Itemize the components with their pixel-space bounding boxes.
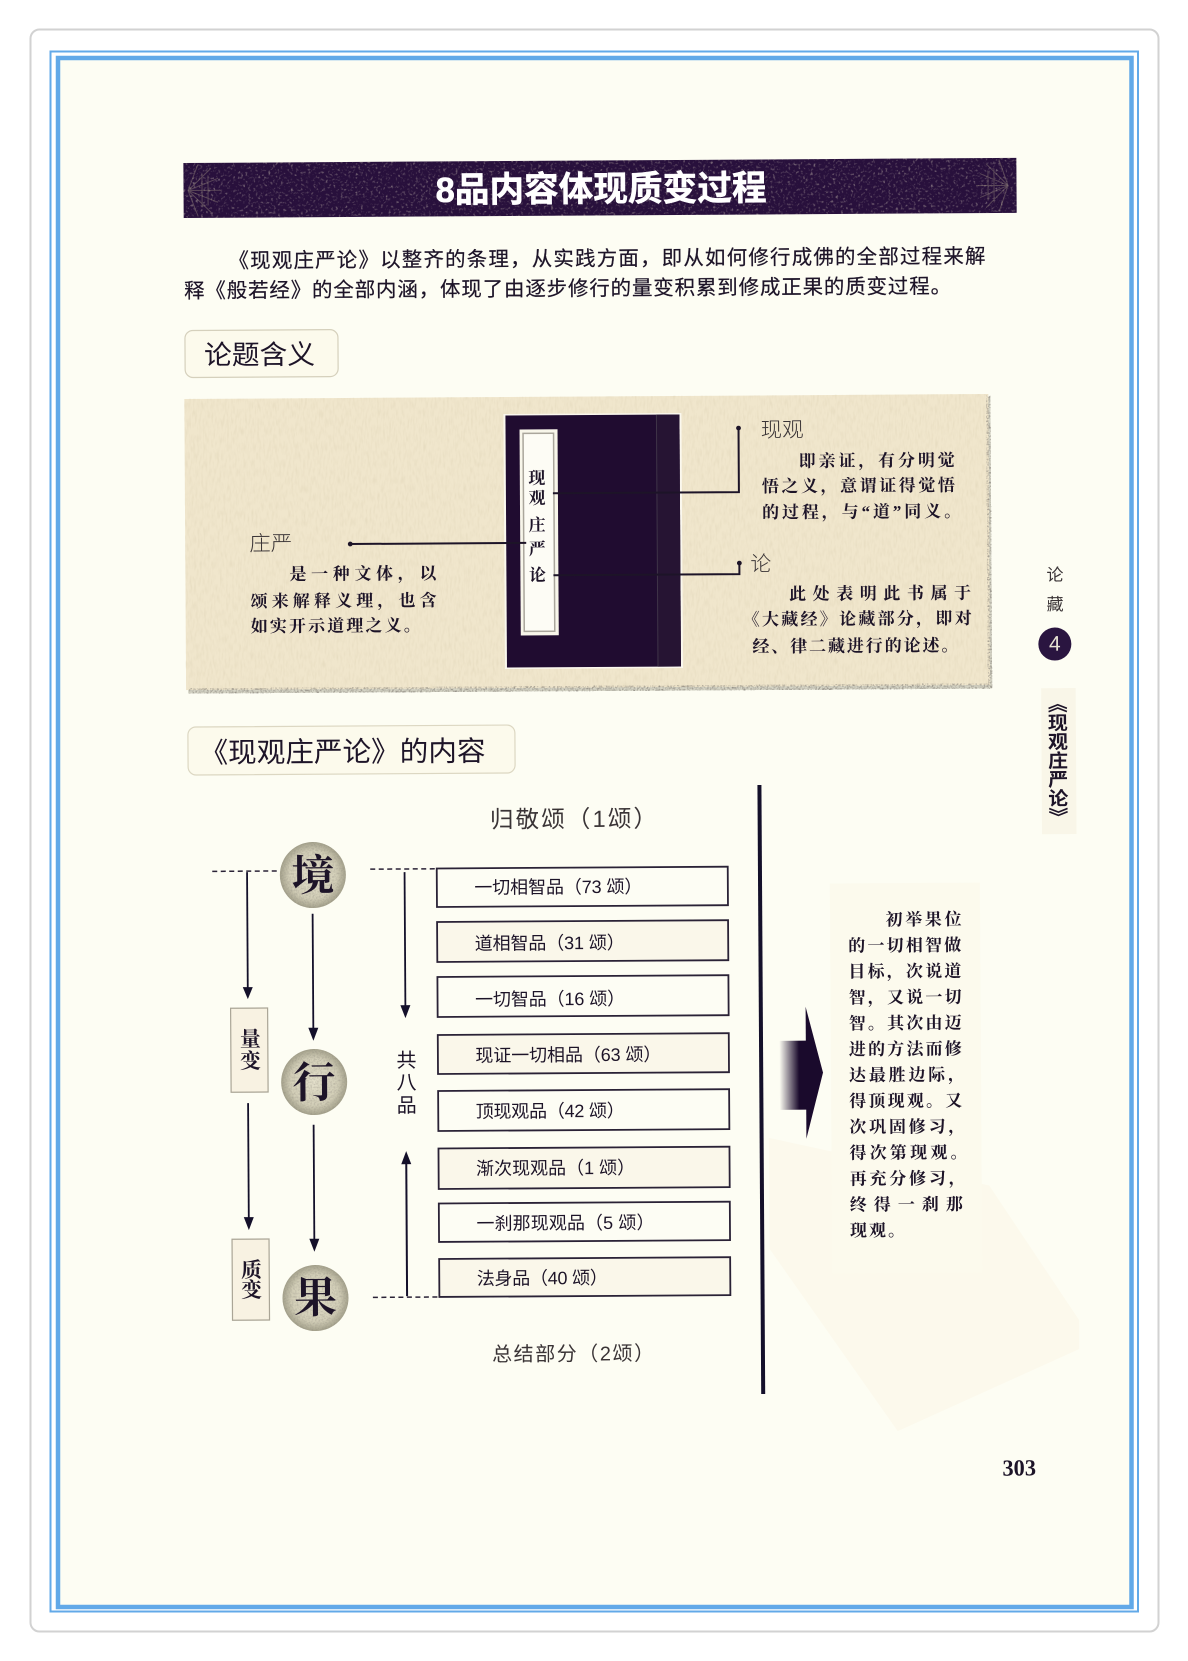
arrow: up to 共八品: [401, 1151, 412, 1296]
note: 论: 《大藏经》论藏部分，即对: [743, 608, 972, 630]
chapter 1: 一切相智品（73 颂）: [474, 877, 642, 898]
tag: 质变: 质: [241, 1258, 262, 1282]
chapter 6: 渐次现观品（1 颂）: [476, 1158, 635, 1179]
watermark shape: [769, 1136, 1080, 1432]
tag: 质变: [232, 1239, 270, 1320]
side label: 论藏: 论: [1046, 566, 1063, 585]
chapter 1: [437, 867, 728, 907]
tag: 量变: 量: [240, 1027, 261, 1051]
arrow: 境 to 行: [308, 914, 318, 1041]
note: 论: [742, 552, 972, 656]
page content: [183, 158, 1081, 1486]
side badge: 4: [1038, 627, 1071, 661]
note: 论: 经、律二藏进行的论述。: [752, 635, 958, 656]
tag: 量变: [231, 1008, 268, 1092]
panel: explanation: [830, 883, 982, 1274]
node: 境: [280, 842, 346, 908]
side tab: 《现观庄严论》: 《现观庄严论》: [1044, 694, 1068, 826]
heading: 论题含义: [185, 330, 338, 378]
book title: 论: [529, 566, 546, 585]
page number: 303: [1002, 1455, 1036, 1481]
intro paragraph: [184, 245, 986, 303]
label: 总结部分: 总结部分（2颂）: [492, 1342, 654, 1366]
panel: explanation: 次巩固修习，: [849, 1116, 965, 1138]
node: 行: 行: [293, 1059, 336, 1108]
chapter 4: [438, 1033, 729, 1074]
book title: 庄: [529, 516, 546, 535]
ornament: left sunburst: [188, 164, 221, 217]
note: 现观: 的过程，与“道”同义。: [762, 501, 961, 523]
leader: 论: [553, 563, 739, 575]
label: 共八品: 共: [396, 1049, 416, 1072]
arrow: down to 共八品: [400, 872, 410, 1018]
banner title: 8品内容体现质变过程: [435, 169, 767, 210]
arrow: 行 to 果: [309, 1125, 319, 1252]
book title: 观: [528, 489, 546, 508]
heading: 论题含义: 论题含义: [204, 340, 315, 370]
panel: explanation: 进的方法而修: [849, 1039, 962, 1059]
note: 庄严: 庄严: [249, 532, 292, 556]
tag: 质变: 变: [241, 1278, 263, 1302]
book title: 严: [529, 540, 546, 559]
note: 庄严: [249, 531, 439, 636]
label: 归敬颂: 归敬颂（1颂）: [490, 806, 657, 833]
panel: explanation: 的一切相智做: [848, 936, 961, 956]
book: [503, 413, 683, 669]
heading: 《现观庄严论》的内容: 《现观庄严论》的内容: [199, 736, 486, 768]
book title: 现: [528, 469, 545, 488]
panel: explanation: 智。其次由迈: [849, 1013, 962, 1033]
side badge: 4: 4: [1049, 633, 1061, 656]
intro paragraph: 释《般若经》的全部内涵，体现了由逐步修行的量变积累到修成正果的质变过程。: [184, 275, 951, 303]
note: 庄严: 如实开示道理之义。: [251, 615, 421, 636]
chapter 7: [439, 1202, 730, 1242]
note: 庄严: 颂来解释义理，也含: [251, 591, 437, 612]
ornament: right sunburst: [976, 159, 1008, 212]
panel: explanation: 终得一刹那: [850, 1194, 963, 1215]
chapter 2: [437, 920, 728, 962]
tag: 量变: 变: [240, 1049, 262, 1073]
chapter 7: 一刹那现观品（5 颂）: [476, 1213, 654, 1234]
chapter 3: 一切智品（16 颂）: [475, 989, 625, 1010]
panel: explanation: 再充分修习，: [850, 1168, 966, 1190]
panel: explanation: 达最胜边际，: [849, 1064, 965, 1086]
side tab: 《现观庄严论》: [1041, 688, 1077, 834]
chapter 5: [438, 1089, 729, 1131]
note: 庄严: 是一种文体，以: [289, 563, 438, 585]
book label: [520, 429, 559, 635]
note: 现观: [760, 418, 961, 523]
note: 论: 此处表明此书属于: [789, 583, 971, 604]
side label: 论藏: [1046, 566, 1064, 614]
note: 论: 论: [750, 553, 771, 576]
chapter list: [437, 867, 730, 1297]
chapter 5: 顶现观品（42 颂）: [476, 1101, 625, 1122]
dashed guide lines: [212, 869, 440, 1298]
heading: 《现观庄严论》的内容: [188, 725, 515, 775]
side label: 论藏: 藏: [1047, 595, 1064, 614]
node: 果: [282, 1265, 349, 1331]
panel: 论题含义: [184, 394, 992, 694]
chapter 3: [437, 975, 729, 1017]
leader: 庄严: [350, 543, 526, 544]
note: 现观: 悟之义，意谓证得觉悟: [762, 475, 955, 497]
title banner: [183, 158, 1017, 218]
chapter 8: 法身品（40 颂）: [477, 1268, 608, 1289]
node: 境: 境: [291, 852, 335, 901]
chapter 2: 道相智品（31 颂）: [475, 933, 625, 954]
panel: explanation: 得顶现观。又: [849, 1091, 962, 1111]
intro paragraph: 《现观庄严论》以整齐的条理，从实践方面，即从如何修行成佛的全部过程来解: [228, 245, 986, 273]
note: 现观: 现观: [760, 419, 804, 442]
book title: [528, 469, 546, 585]
label: 共八品: 品: [397, 1095, 417, 1117]
chapter 8: [439, 1257, 730, 1297]
arrow: 量变 to 质变: [243, 1103, 254, 1230]
label: 共八品: [396, 1049, 417, 1117]
panel: explanation: 得次第现观。: [849, 1142, 968, 1163]
node: 行: [281, 1049, 347, 1115]
panel: explanation: 现观。: [850, 1221, 905, 1240]
chapter 4: 现证一切相品（63 颂）: [475, 1045, 661, 1066]
chapter 6: [438, 1147, 730, 1189]
leader: 现观: [553, 428, 739, 493]
panel: explanation: 目标，次说道: [848, 961, 961, 982]
node: 果: 果: [294, 1275, 337, 1323]
note: 现观: 即亲证，有分明觉: [799, 450, 955, 472]
panel: explanation: 智，又说一切: [848, 988, 962, 1008]
divider: thick vertical line: [759, 785, 763, 1394]
label: 共八品: 八: [396, 1072, 417, 1094]
arrow: 境 to 量变: [242, 872, 253, 999]
panel: explanation: 初举果位: [886, 910, 962, 929]
arrow: to explanation: [779, 1007, 823, 1139]
